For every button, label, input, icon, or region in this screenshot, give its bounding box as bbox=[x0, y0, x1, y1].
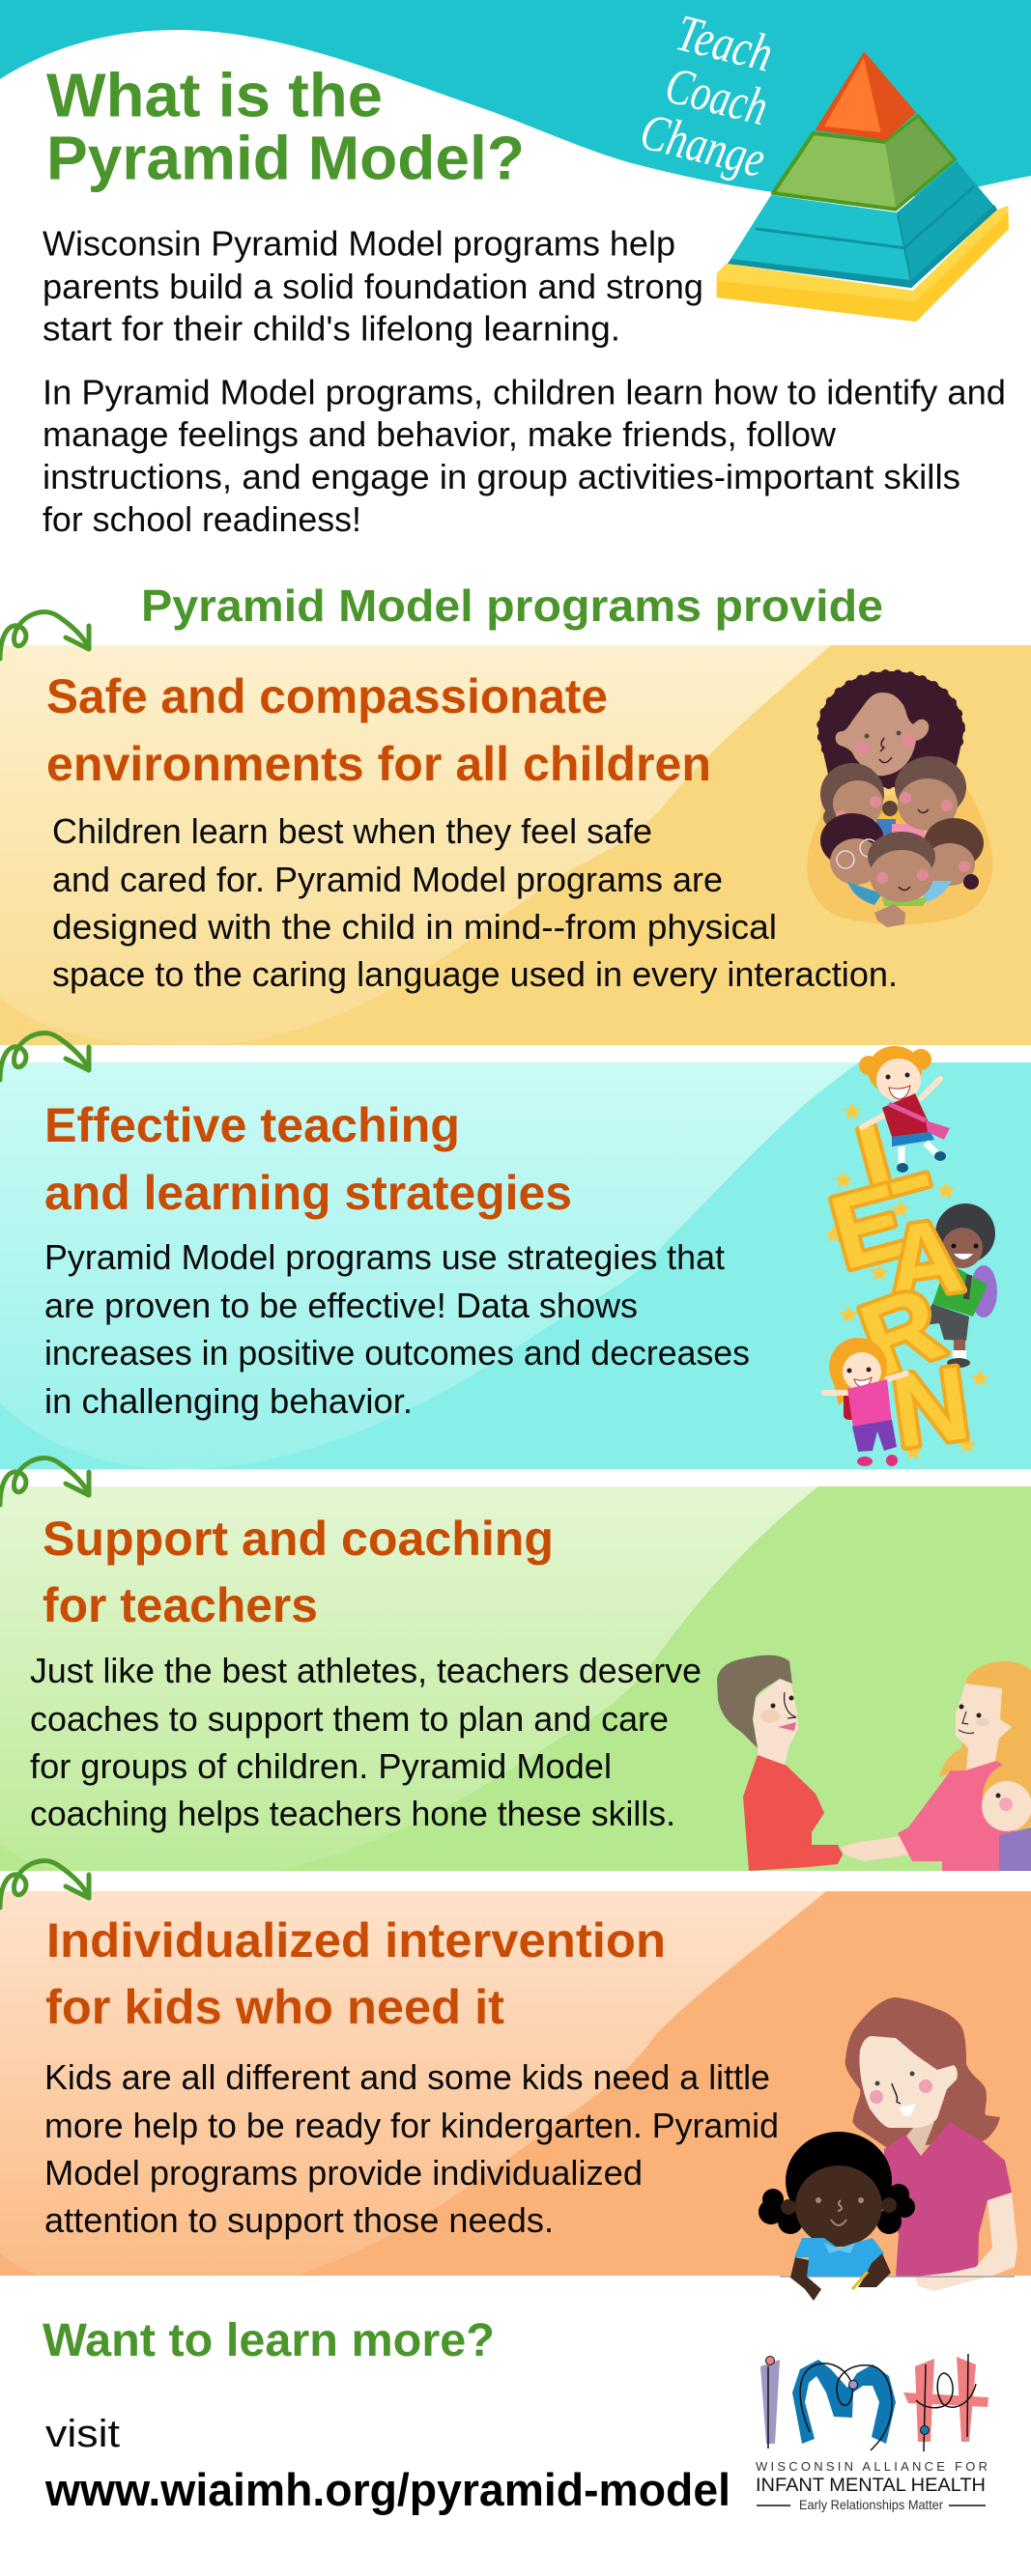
illustration: mother and child bbox=[759, 1997, 1017, 2301]
script text: Teach Coach Change: Teach bbox=[671, 3, 779, 83]
intro paragraph 2: instructions, and engage in group activities-important skills bbox=[43, 457, 960, 496]
body: coaching bbox=[30, 1651, 702, 1833]
person: coach in red bbox=[717, 1656, 843, 1871]
letters: E bbox=[819, 1161, 917, 1291]
title bbox=[46, 60, 525, 193]
body: safe: Children learn best when they feel safe bbox=[52, 811, 652, 851]
script text: Teach Coach Change: Change bbox=[635, 101, 771, 188]
body: intervention bbox=[44, 2057, 779, 2240]
body: safe bbox=[52, 811, 898, 994]
logo: Wisconsin Alliance for Infant Mental Health bbox=[756, 2354, 988, 2512]
body: teaching: Pyramid Model programs use strategies that bbox=[44, 1237, 725, 1277]
intro paragraph 1: parents build a solid foundation and strong bbox=[43, 267, 703, 306]
intro paragraph 2: manage feelings and behavior, make friends, follow bbox=[43, 414, 837, 454]
arrow: section 2 bbox=[0, 1033, 89, 1080]
heading: teaching: Effective teaching bbox=[44, 1098, 460, 1152]
heading: coaching: Support and coaching bbox=[43, 1512, 554, 1566]
table line bbox=[780, 2276, 1015, 2278]
footer url: www.wiaimh.org/pyramid-model bbox=[44, 2464, 730, 2515]
script text: Teach Coach Change bbox=[635, 3, 779, 188]
child: upper left bbox=[820, 763, 884, 827]
heading: intervention: for kids who need it bbox=[45, 1980, 504, 2034]
illustration: teacher and coach shaking hands bbox=[717, 1656, 1031, 1871]
footer heading: Want to learn more? bbox=[43, 2315, 495, 2366]
body: safe: designed with the child in mind--from physical bbox=[52, 907, 777, 947]
intro paragraph 2: for school readiness! bbox=[43, 499, 361, 539]
child: girl with bag bbox=[859, 1046, 950, 1173]
body: safe: and cared for. Pyramid Model programs are bbox=[52, 860, 723, 899]
heading: safe: Safe and compassionate bbox=[46, 669, 608, 723]
child: girl in pink bbox=[824, 1338, 906, 1466]
body: teaching: in challenging behavior. bbox=[44, 1381, 413, 1421]
heading: safe: environments for all children bbox=[46, 737, 711, 791]
person: teacher in pink with child bbox=[898, 1661, 1031, 1871]
hand bbox=[874, 904, 905, 927]
stars bbox=[825, 1102, 989, 1459]
intro paragraph 1 bbox=[43, 224, 703, 348]
child: centre bbox=[868, 832, 935, 902]
body: intervention: Model programs provide individualized bbox=[44, 2153, 643, 2193]
body: teaching: are proven to be effective! Data shows bbox=[44, 1286, 638, 1325]
body: coaching: for groups of children. Pyramid Model bbox=[30, 1746, 612, 1786]
intro paragraph 1: Wisconsin Pyramid Model programs help bbox=[43, 224, 675, 263]
illustration: mother and children bbox=[807, 674, 992, 927]
heading: teaching bbox=[44, 1098, 572, 1220]
heading: intervention bbox=[45, 1913, 666, 2034]
logo: Wisconsin Alliance for Infant Mental Health: WISCONSIN ALLIANCE FOR bbox=[756, 2459, 988, 2474]
body: teaching: increases in positive outcomes and decreases bbox=[44, 1333, 750, 1373]
logo: Wisconsin Alliance for Infant Mental Health: Early Relationships Matter bbox=[799, 2497, 943, 2512]
mid clothing bbox=[874, 807, 932, 837]
person: child bbox=[759, 2132, 915, 2301]
letters bbox=[819, 1092, 976, 1470]
child: lower right bbox=[924, 818, 984, 890]
arrow: section 4 bbox=[0, 1861, 89, 1908]
heading: coaching bbox=[43, 1512, 554, 1632]
body: coaching: Just like the best athletes, teachers deserve bbox=[30, 1651, 702, 1690]
title: What is the bbox=[46, 60, 383, 129]
child: glasses bbox=[820, 813, 884, 885]
panel: coaching bbox=[0, 1486, 1031, 1871]
intro paragraph 1: start for their child's lifelong learning. bbox=[43, 309, 620, 348]
body: teaching bbox=[44, 1237, 750, 1421]
letters: L bbox=[846, 1092, 938, 1222]
heading: teaching: and learning strategies bbox=[44, 1166, 572, 1220]
illustration: LEARN letters and children bbox=[819, 1046, 997, 1470]
teal wave header bbox=[0, 0, 1031, 199]
body: safe: space to the caring language used in every interaction. bbox=[52, 954, 898, 994]
child: upper right bbox=[882, 756, 966, 831]
title: Pyramid Model? bbox=[46, 124, 525, 193]
intro paragraph 2 bbox=[43, 373, 1006, 539]
clothing: bottom bbox=[847, 881, 952, 906]
footer visit text: visit bbox=[45, 2413, 120, 2455]
letters: A bbox=[878, 1196, 969, 1322]
icon: pyramid bbox=[717, 51, 1009, 322]
intro paragraph 2: In Pyramid Model programs, children learn how to identify and bbox=[43, 373, 1006, 411]
script text: Teach Coach Change: Coach bbox=[660, 55, 773, 136]
arrow: section 3 bbox=[0, 1458, 89, 1505]
logo: Wisconsin Alliance for Infant Mental Health: INFANT MENTAL HEALTH bbox=[756, 2476, 986, 2496]
heading: intervention: Individualized intervention bbox=[46, 1913, 666, 1967]
arrow: section 1 bbox=[0, 612, 89, 659]
body: coaching: coaching helps teachers hone these skills. bbox=[30, 1794, 675, 1833]
body: coaching: coaches to support them to plan and care bbox=[30, 1699, 669, 1739]
heading: safe bbox=[46, 669, 711, 791]
body: intervention: attention to support those needs. bbox=[44, 2200, 554, 2240]
letters: R bbox=[845, 1263, 957, 1400]
panel: safe environments bbox=[0, 645, 1031, 1045]
panel: teaching strategies bbox=[0, 1046, 1031, 1470]
hands bbox=[841, 1835, 912, 1861]
body: intervention: Kids are all different and some kids need a little bbox=[44, 2057, 770, 2097]
heading: coaching: for teachers bbox=[43, 1578, 318, 1632]
section heading: Pyramid Model programs provide bbox=[141, 580, 883, 631]
person: mother bbox=[821, 674, 961, 787]
child: boy with backpack bbox=[918, 1203, 997, 1368]
panel: individualized intervention bbox=[0, 1891, 1031, 2276]
body: intervention: more help to be ready for kindergarten. Pyramid bbox=[44, 2106, 779, 2145]
person: mother bbox=[845, 1997, 1017, 2291]
letters: N bbox=[885, 1344, 976, 1470]
